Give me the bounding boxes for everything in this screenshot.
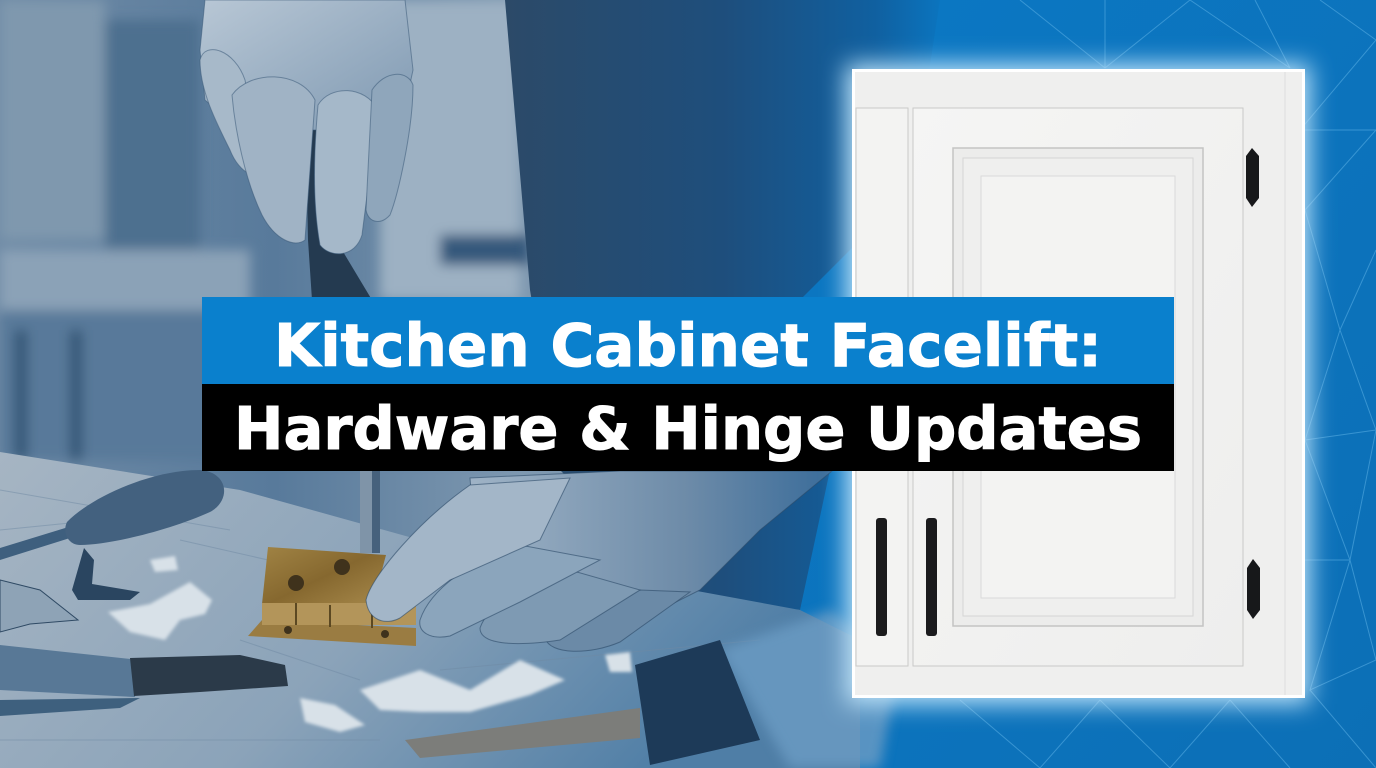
- raised panel: [953, 148, 1203, 626]
- screwdriver in hand: [305, 100, 380, 553]
- title line 1: Kitchen Cabinet Facelift:: [274, 311, 1102, 380]
- inner panel: [981, 176, 1175, 598]
- finger 1: [200, 50, 262, 175]
- hammer: [405, 610, 900, 768]
- workbench: [0, 452, 860, 768]
- white glow: [846, 64, 1310, 704]
- palm: [200, 0, 413, 130]
- lower hinge: [1247, 559, 1260, 619]
- loose hinge on bench: [0, 580, 78, 632]
- finger 4: [366, 74, 413, 221]
- banner: blue band: [202, 297, 1174, 384]
- upper hand: [200, 0, 413, 254]
- middle finger: [420, 545, 600, 637]
- handle right: [926, 518, 937, 636]
- dark blue shirt: [505, 0, 940, 610]
- thumb and index finger: [366, 478, 570, 621]
- banner: black band: [202, 384, 1174, 471]
- finger 3: [314, 91, 378, 254]
- title line 2: Hardware & Hinge Updates: [234, 394, 1142, 463]
- cabinet frame: [854, 70, 1304, 696]
- back of hand and wrist: [470, 471, 832, 620]
- pliers: [0, 645, 288, 716]
- left neighbouring door: [856, 108, 908, 666]
- ring finger: [480, 570, 640, 644]
- lower hand: [366, 471, 832, 651]
- little finger: [545, 590, 690, 651]
- geometric line pattern: [960, 0, 1376, 768]
- handle left: [876, 518, 887, 636]
- screwdriver on bench: [0, 470, 224, 560]
- brass hinge: [248, 547, 416, 646]
- main door: [913, 108, 1243, 666]
- wood shavings: [108, 556, 632, 732]
- finger 2: [232, 77, 315, 243]
- blue panel behind cabinet: [800, 0, 1376, 768]
- cabinet photo: [846, 64, 1310, 704]
- title banner: [202, 297, 1174, 471]
- frame shading: [1284, 72, 1286, 695]
- upper hinge: [1246, 148, 1259, 207]
- small bracket on bench: [72, 548, 140, 600]
